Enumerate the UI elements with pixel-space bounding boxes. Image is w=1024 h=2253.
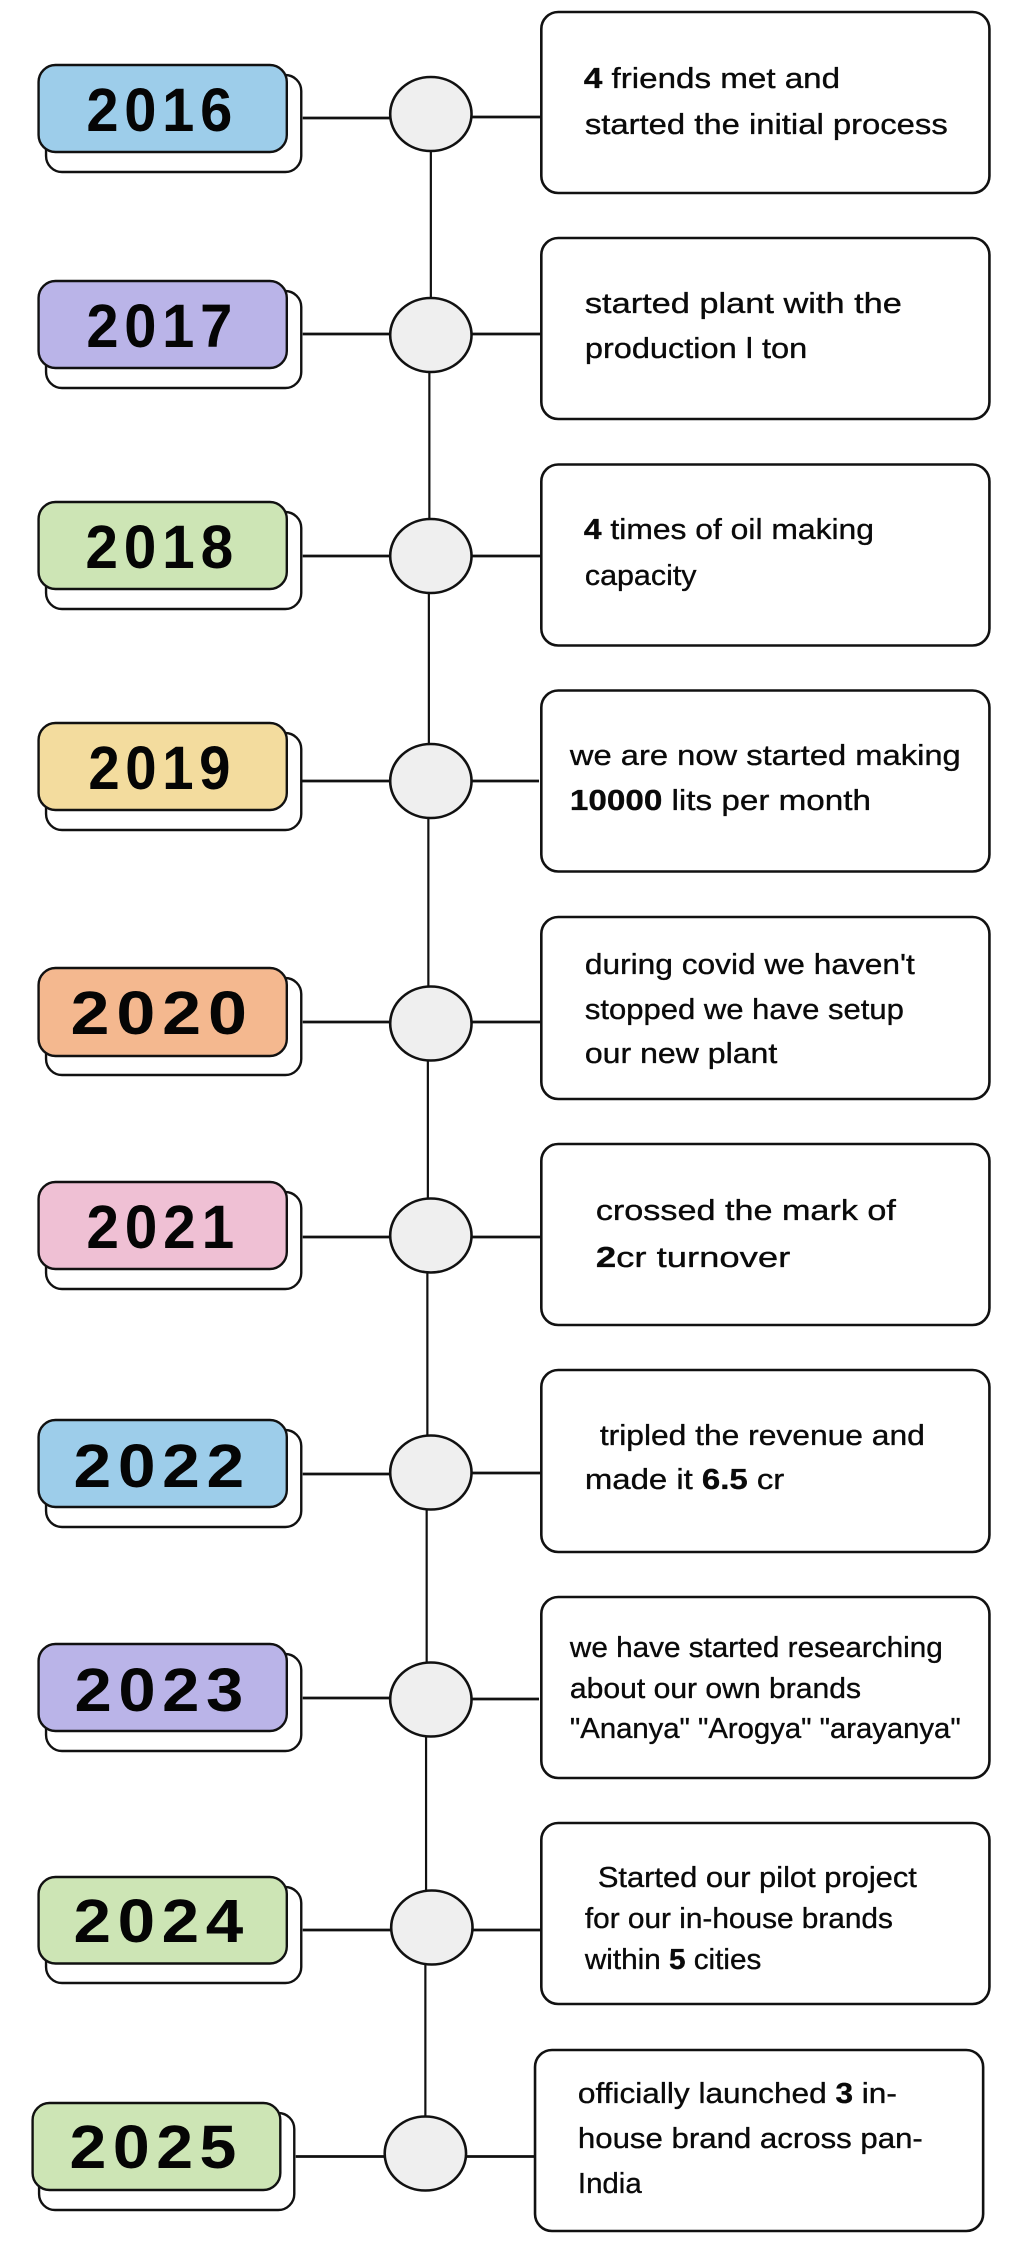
description card: 4 friends met and: [584, 63, 840, 95]
year badge 2023: [39, 1644, 301, 1751]
row: 2021: [39, 1144, 989, 1325]
timeline node: [390, 986, 472, 1060]
description card: our new plant: [585, 1038, 777, 1070]
year badge 2019: [39, 723, 301, 830]
year badge 2017: 2017: [86, 292, 238, 360]
year badge 2025: 2025: [69, 2113, 243, 2181]
row: 2016: [39, 12, 989, 193]
description card: house brand across pan-: [578, 2123, 923, 2155]
connector right: [471, 1698, 539, 1700]
row: 2022: [39, 1370, 989, 1552]
year badge 2021: 2021: [86, 1193, 240, 1261]
description card: 4 times of oil making: [584, 514, 874, 546]
description card: for our in-house brands: [585, 1903, 893, 1935]
year badge 2017: [39, 281, 301, 388]
description card: we have started researching: [569, 1632, 943, 1664]
timeline node: [390, 298, 472, 372]
connector left: [303, 117, 390, 119]
connector right: [471, 333, 541, 335]
description card: [541, 1370, 989, 1552]
description card: [541, 917, 989, 1099]
description card: within 5 cities: [584, 1944, 761, 1976]
connector left: [303, 1021, 390, 1023]
description card: stopped we have setup: [585, 994, 904, 1026]
timeline node: [390, 519, 472, 593]
year badge 2023: 2023: [74, 1656, 250, 1724]
description card: [541, 1823, 989, 2004]
year badge 2022: [39, 1420, 301, 1527]
description card: we are now started making: [569, 740, 961, 772]
description card: [541, 238, 989, 419]
row: 2025: [33, 2050, 983, 2231]
timeline node: [390, 744, 472, 818]
description card: capacity: [585, 560, 697, 592]
timeline node: [390, 1436, 472, 1510]
description card: [541, 464, 989, 646]
description card: during covid we haven't: [585, 949, 915, 981]
description card: officially launched 3 in-: [578, 2078, 897, 2110]
description card: [541, 1597, 989, 1778]
connector right: [471, 1472, 541, 1474]
row: 2017: [39, 238, 989, 419]
description card: made it 6.5 cr: [585, 1464, 785, 1496]
timeline node: [385, 2116, 466, 2190]
description card: started the initial process: [585, 109, 948, 141]
description card: 2cr turnover: [596, 1242, 791, 1274]
description card: tripled the revenue and: [600, 1420, 925, 1452]
row: 2018: [39, 464, 989, 646]
year badge 2024: 2024: [73, 1887, 250, 1955]
year badge 2016: 2016: [86, 76, 238, 144]
connector left: [302, 780, 390, 782]
row: 2020: [39, 917, 989, 1099]
year badge 2024: [39, 1877, 301, 1983]
year badge 2016: [39, 65, 301, 172]
year badge 2022: 2022: [73, 1432, 251, 1500]
timeline node: [390, 77, 472, 151]
year badge 2020: 2020: [70, 979, 254, 1047]
description card: [541, 1144, 989, 1325]
description card: production l ton: [585, 333, 807, 365]
timeline node: [390, 1198, 472, 1272]
connector right: [471, 1236, 541, 1238]
year badge 2025: [33, 2103, 294, 2210]
year badge 2018: [39, 502, 301, 609]
connector right: [471, 116, 541, 118]
connector right: [471, 1021, 541, 1023]
year badge 2020: [39, 968, 301, 1075]
description card: [535, 2050, 983, 2231]
year badge 2018: 2018: [85, 513, 239, 581]
connector left: [303, 555, 390, 557]
connector right: [471, 1929, 541, 1931]
connector right: [471, 555, 541, 557]
description card: started plant with the: [585, 288, 902, 320]
vertical timeline spine: [425, 151, 431, 2117]
connector right: [465, 2155, 534, 2158]
connector right: [471, 780, 539, 782]
description card: "Ananya" "Arogya" "arayanya": [570, 1713, 961, 1745]
connector left: [296, 2155, 385, 2158]
connector left: [303, 1929, 391, 1931]
description card: 10000 lits per month: [570, 785, 871, 817]
connector left: [303, 1697, 390, 1699]
row: 2023: [39, 1597, 989, 1778]
row: 2019: [39, 690, 989, 872]
connector left: [303, 1473, 390, 1475]
description card: [541, 690, 989, 872]
row: 2024: [39, 1823, 989, 2004]
connector left: [303, 333, 390, 335]
description card: crossed the mark of: [596, 1195, 897, 1227]
description card: about our own brands: [570, 1673, 861, 1705]
year badge 2019: 2019: [88, 734, 236, 802]
description card: [541, 12, 989, 193]
description card: Started our pilot project: [598, 1862, 917, 1894]
timeline node: [391, 1890, 473, 1964]
year badge 2021: [39, 1182, 301, 1289]
timeline node: [390, 1662, 472, 1736]
description card: India: [578, 2168, 643, 2200]
connector left: [303, 1236, 390, 1238]
